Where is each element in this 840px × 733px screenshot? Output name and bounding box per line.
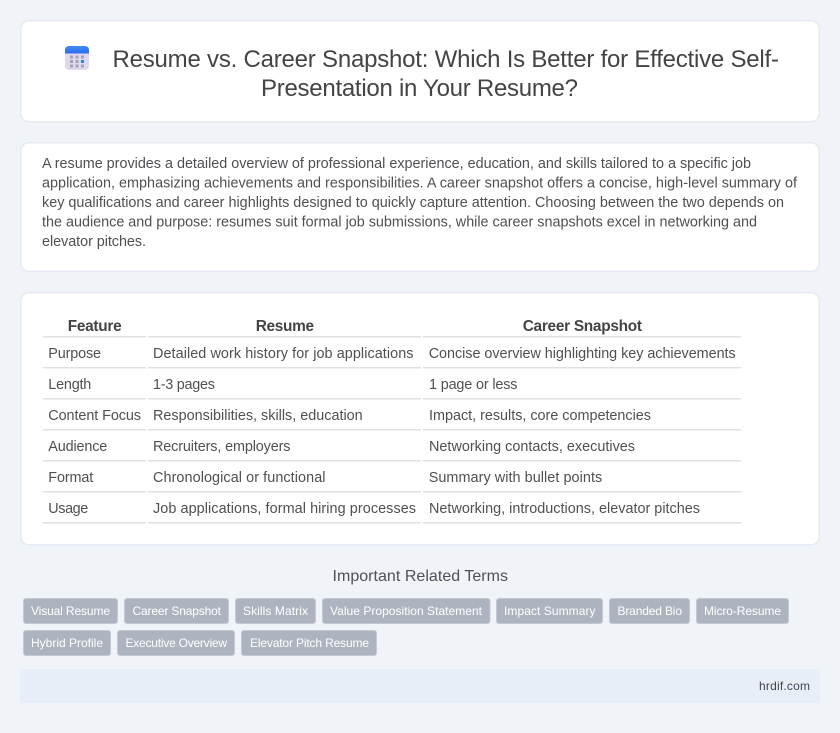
row: length [48,377,518,393]
row: audience: Networking contacts, executives [429,439,635,455]
tag: Skills Matrix [236,598,316,624]
tags: related terms [24,598,788,656]
row: length: 1-3 pages [153,377,215,393]
row: format: Summary with bullet points [429,470,602,486]
table header [68,318,642,335]
row: format: Format [48,470,93,486]
tag: Visual Resume [24,598,118,624]
tag: Branded Bio [610,598,690,624]
row: format [48,470,602,486]
tag: Career Snapshot [124,598,228,624]
tag: Career Snapshot: Career Snapshot [132,604,222,618]
row: content focus: Responsibilities, skills, education [153,408,363,424]
tag: Value Proposition Statement [322,598,490,624]
tag: Hybrid Profile [24,630,110,656]
title: Resume vs. Career Snapshot: Which Is Better for Effective Self- [112,46,779,73]
row: purpose [48,346,736,362]
tag: Branded Bio: Branded Bio [618,604,682,618]
row: format: Chronological or functional [153,470,326,486]
row: usage: Job applications, formal hiring processes [153,501,416,517]
table header: Career Snapshot [523,318,642,335]
text block: description paragraph: application, emphasizing achievements and responsibilities. A career snapshot offers a concise, high-level summary of [42,176,798,192]
row: audience [48,439,635,455]
heading: related terms: Important Related Terms [332,568,508,585]
tag: Impact Summary [496,598,602,624]
tag: Executive Overview: Executive Overview [126,636,227,650]
tag: Elevator Pitch Resume: Elevator Pitch Resume [250,636,369,650]
tag: Visual Resume: Visual Resume [31,604,110,618]
row: purpose: Detailed work history for job applications [153,346,414,362]
tag: Skills Matrix: Skills Matrix [243,604,308,618]
tag: Elevator Pitch Resume [242,630,376,656]
row: usage: Usage [48,501,88,517]
row: usage [48,501,700,517]
text block: description paragraph: A resume provides a detailed overview of professional experience, education, and skills tailored to a specific job [42,156,751,172]
tag: Impact Summary: Impact Summary [504,604,596,618]
table rules [43,336,741,524]
footer: hrdif.com [759,679,810,693]
row: audience: Recruiters, employers [153,439,290,455]
row: usage: Networking, introductions, elevator pitches [429,501,700,517]
icon: calendar [65,46,89,70]
table header: Feature [68,318,122,335]
title: Presentation in Your Resume? [261,75,578,102]
panel: description [21,143,819,271]
tag: Hybrid Profile: Hybrid Profile [31,636,103,650]
row: length: Length [48,377,91,393]
tag: Executive Overview [118,630,234,656]
tag: Value Proposition Statement: Value Proposition Statement [330,604,483,618]
row: length: 1 page or less [429,377,518,393]
text block: description paragraph: elevator pitches. [42,234,146,250]
text block: description paragraph: the audience and purpose: resumes suit formal job submissions, while career snapshots excel in networking and [42,214,757,230]
tag: Micro-Resume: Micro-Resume [704,604,781,618]
row: content focus: Content Focus [48,408,141,424]
panel: comparison table [21,293,819,545]
table header: Resume [256,318,314,335]
title [112,46,779,102]
tag: Micro-Resume [696,598,788,624]
text block: description paragraph [42,156,798,250]
row: purpose: Concise overview highlighting key achievements [429,346,736,362]
row: content focus: Impact, results, core competencies [429,408,651,424]
text block: description paragraph: key qualifications and career highlights designed to quickly capture attention. Choosing between the two depends on [42,195,784,211]
panel: header card [21,21,819,122]
row: content focus [48,408,651,424]
footer [20,669,820,703]
row: purpose: Purpose [48,346,101,362]
row: audience: Audience [48,439,107,455]
